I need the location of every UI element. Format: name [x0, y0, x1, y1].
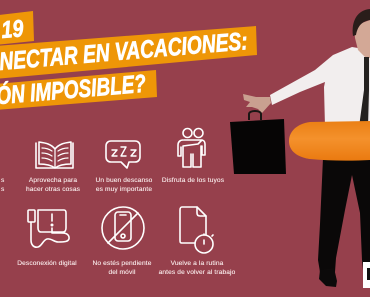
tip: first column, cropped	[1, 177, 5, 193]
tip: phone: del móvil	[108, 269, 136, 276]
icon: two people embracing	[178, 128, 205, 167]
trousers	[318, 155, 370, 272]
banner: headline line 1: NECTAR EN VACACIONES:	[0, 27, 249, 76]
tip: routine	[159, 207, 236, 276]
tip: book: Aprovecha para	[29, 177, 77, 184]
tip: first column, cropped: s	[1, 177, 5, 184]
hair	[353, 9, 370, 36]
icon: open book	[36, 142, 73, 168]
tip: rest: es muy importante	[96, 186, 152, 193]
banner: year: 19	[0, 15, 25, 44]
banner: headline line 2: ÓN IMPOSIBLE?	[0, 69, 147, 110]
tip: phone: No estés pendiente	[93, 260, 152, 267]
tip: family: Disfruta de los tuyos	[162, 177, 225, 184]
shoe	[319, 268, 337, 287]
tip: rest: Un buen descanso	[96, 177, 153, 184]
title block	[0, 11, 257, 110]
tip: first column, cropped: s	[1, 186, 5, 193]
photo: man with swim ring	[230, 9, 370, 288]
icon: crossed out phone	[102, 207, 144, 249]
tie	[359, 57, 369, 127]
icon: monitor with cable	[28, 210, 69, 247]
briefcase	[230, 111, 286, 174]
swim ring	[289, 121, 370, 161]
logo box	[363, 262, 370, 288]
shirt	[270, 47, 370, 127]
hand	[243, 94, 271, 113]
icon: document and stopwatch	[180, 207, 213, 253]
tip: family	[162, 128, 225, 184]
tip: rest	[96, 141, 153, 193]
icon: speech bubble zzz	[106, 141, 140, 168]
tip: phone	[93, 207, 152, 276]
tip: routine: Vuelve a la rutina	[171, 260, 224, 267]
tip: book	[26, 142, 81, 193]
tip: routine: antes de volver al trabajo	[159, 269, 236, 276]
neck and head	[354, 20, 370, 58]
tip: digital disconnection: Desconexión digital	[17, 260, 77, 267]
tip: digital disconnection	[17, 210, 77, 267]
tip: book: hacer otras cosas	[26, 186, 81, 193]
banner: headline line 1	[0, 26, 257, 79]
